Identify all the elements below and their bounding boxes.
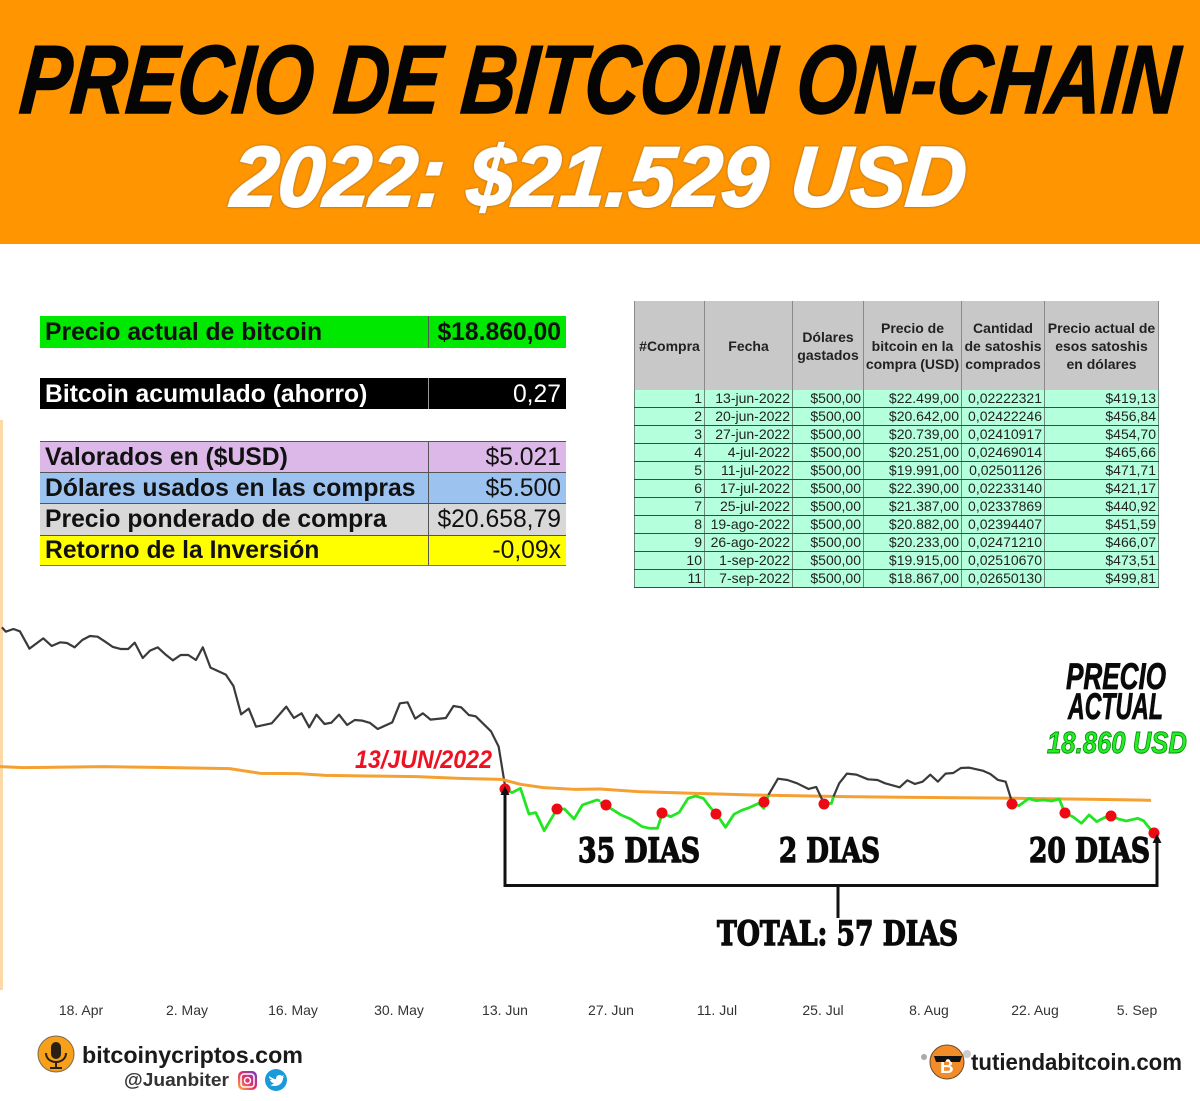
purchases table: 0,02510670 — [968, 552, 1042, 568]
row: bitcoin acumulado — [40, 378, 566, 409]
row: valorados: Valorados en ($USD) — [45, 444, 288, 471]
purchases table: $22.390,00 — [889, 480, 959, 496]
purchases table: $500,00 — [810, 570, 861, 586]
row: bitcoin acumulado: Bitcoin acumulado (ahorro) — [45, 381, 367, 408]
row: retorno: -0,09x — [492, 537, 561, 564]
purchases table: 0,02222321 — [968, 390, 1042, 406]
purchases table: #Compra — [639, 338, 700, 354]
purchases table: $20.739,00 — [889, 426, 959, 442]
footer right: tutiendabitcoin — [921, 1044, 1182, 1080]
purchases table: 4-jul-2022 — [728, 444, 790, 460]
line: bitcoin price right — [600, 768, 1154, 833]
purchases table: $500,00 — [810, 426, 861, 442]
purchases table: $454,70 — [1105, 426, 1156, 442]
purchases table: $20.882,00 — [889, 516, 959, 532]
x axis labels: 16. May — [268, 1002, 318, 1018]
purchases table: bitcoin en la — [872, 338, 953, 354]
purchases table: $471,71 — [1105, 462, 1156, 478]
purchases table: $500,00 — [810, 552, 861, 568]
label: total: TOTAL: 57 DIAS — [717, 914, 958, 954]
purchases table: esos satoshis — [1055, 338, 1148, 354]
row: dolares usados: Dólares usados en las compras — [45, 475, 415, 502]
purchases table: 1-sep-2022 — [719, 552, 790, 568]
row: valorados — [40, 441, 566, 472]
icon: twitter — [265, 1069, 287, 1091]
purchases table: $440,92 — [1105, 498, 1156, 514]
icon: instagram — [238, 1071, 257, 1090]
purchases table: $500,00 — [810, 462, 861, 478]
purchases table: 13-jun-2022 — [715, 390, 790, 406]
label: 2 dias: 2 DIAS — [779, 831, 880, 871]
price chart — [0, 420, 1187, 990]
purchases table: $21.387,00 — [889, 498, 959, 514]
row: precio actual: Precio actual de bitcoin — [45, 319, 322, 346]
purchases table: $20.251,00 — [889, 444, 959, 460]
purchases table: $19.915,00 — [889, 552, 959, 568]
purchases table: 0,02394407 — [968, 516, 1042, 532]
purchases table: en dólares — [1066, 356, 1137, 372]
row: dolares usados — [40, 472, 566, 503]
date label: 13/JUN/2022 — [355, 746, 492, 774]
purchases table: Fecha — [728, 338, 769, 354]
row: precio ponderado — [40, 503, 566, 535]
row: precio ponderado: Precio ponderado de compra — [45, 506, 387, 533]
purchases table: 1 — [694, 390, 702, 406]
x axis labels: 11. Jul — [697, 1002, 737, 1018]
purchases table: 0,02233140 — [968, 480, 1042, 496]
website text: bitcoinycriptos.com — [82, 1042, 303, 1068]
x axis labels: 27. Jun — [588, 1002, 634, 1018]
row: dolares usados: $5.500 — [485, 475, 561, 502]
purchases table: Dólares — [802, 328, 854, 344]
label: precio actual — [1066, 656, 1166, 727]
row: precio actual: $18.860,00 — [437, 319, 561, 346]
footer left: bitcoinycriptos — [38, 1036, 303, 1091]
purchases table: $451,59 — [1105, 516, 1156, 532]
purchases table: 5 — [694, 462, 702, 478]
purchases table: 10 — [686, 552, 702, 568]
icon: microphone logo — [38, 1036, 74, 1072]
purchases table: $500,00 — [810, 480, 861, 496]
purchases table: $500,00 — [810, 534, 861, 550]
purchases table: de satoshis — [964, 338, 1042, 354]
purchases table: 2 — [694, 408, 702, 424]
purchases table: 26-ago-2022 — [711, 534, 790, 550]
purchases table: compra (USD) — [866, 356, 959, 372]
summary table — [40, 316, 566, 566]
purchases table: 3 — [694, 426, 702, 442]
purchases table: $18.867,00 — [889, 570, 959, 586]
header banner — [0, 0, 1200, 244]
purchases table: $456,84 — [1105, 408, 1156, 424]
icon: bitcoin with sunglasses: B — [940, 1057, 954, 1078]
purchases table: $500,00 — [810, 516, 861, 532]
purchases table: $421,17 — [1105, 480, 1156, 496]
purchases table: 11-jul-2022 — [721, 462, 790, 478]
purchases table: $419,13 — [1105, 390, 1156, 406]
purchase markers — [500, 784, 1160, 838]
handle text: @Juanbiter — [124, 1070, 229, 1090]
row: valorados: $5.021 — [485, 444, 561, 471]
purchases table: $500,00 — [810, 408, 861, 424]
purchases table: 0,02410917 — [968, 426, 1042, 442]
line: bitcoin price left — [0, 627, 600, 831]
purchases table: 9 — [694, 534, 702, 550]
purchases table: 20-jun-2022 — [715, 408, 790, 424]
purchases table: $20.642,00 — [889, 408, 959, 424]
purchases table: 8 — [694, 516, 702, 532]
purchases table: 0,02422246 — [968, 408, 1042, 424]
label: 20 dias: 20 DIAS — [1029, 831, 1150, 871]
x axis labels: 22. Aug — [1011, 1002, 1059, 1018]
purchases table: $473,51 — [1105, 552, 1156, 568]
purchases table: Precio actual de — [1048, 320, 1155, 336]
purchases table: 27-jun-2022 — [715, 426, 790, 442]
purchases table: $500,00 — [810, 498, 861, 514]
purchases table: $22.499,00 — [889, 390, 959, 406]
label: 35 dias: 35 DIAS — [578, 831, 700, 871]
purchases table: 4 — [694, 444, 702, 460]
x axis labels: 25. Jul — [802, 1002, 844, 1018]
x axis labels: 2. May — [166, 1002, 208, 1018]
purchases table: 7-sep-2022 — [719, 570, 790, 586]
purchases table: Cantidad — [973, 320, 1033, 336]
purchases table: $499,81 — [1105, 570, 1156, 586]
x axis labels: 8. Aug — [909, 1002, 949, 1018]
purchases table: 0,02337869 — [968, 498, 1042, 514]
purchases table — [634, 301, 1159, 588]
purchases table: 19-ago-2022 — [711, 516, 790, 532]
subtitle: price: 2022: $21.529 USD — [226, 130, 971, 225]
purchases table: 0,02469014 — [968, 444, 1042, 460]
purchases table: $466,07 — [1105, 534, 1156, 550]
purchases table: $500,00 — [810, 390, 861, 406]
x axis labels — [59, 1002, 1157, 1018]
website text: tutiendabitcoin.com — [971, 1049, 1182, 1075]
x axis labels: 13. Jun — [482, 1002, 528, 1018]
purchases table: 11 — [687, 570, 702, 586]
row: precio actual — [40, 316, 566, 348]
purchases table: $500,00 — [810, 444, 861, 460]
purchases table: 0,02650130 — [968, 570, 1042, 586]
icon: bitcoin with sunglasses — [921, 1045, 971, 1079]
purchases table: $465,66 — [1105, 444, 1156, 460]
purchases table: 17-jul-2022 — [720, 480, 790, 496]
purchases table: 7 — [694, 498, 702, 514]
purchases table: 0,02501126 — [969, 462, 1042, 478]
purchases table: Precio de — [881, 320, 944, 336]
row: retorno — [40, 535, 566, 566]
row: retorno: Retorno de la Inversión — [45, 537, 319, 564]
row: bitcoin acumulado: 0,27 — [513, 381, 561, 408]
purchases table: $19.991,00 — [889, 462, 959, 478]
bracket with arrows — [500, 786, 1162, 918]
purchases table: 0,02471210 — [968, 534, 1042, 550]
purchases table: 25-jul-2022 — [720, 498, 790, 514]
purchases table: 6 — [694, 480, 702, 496]
x axis labels: 30. May — [374, 1002, 424, 1018]
x axis labels: 18. Apr — [59, 1002, 103, 1018]
row: precio ponderado: $20.658,79 — [437, 506, 561, 533]
purchases table: gastados — [797, 346, 859, 362]
purchases table: $20.233,00 — [889, 534, 959, 550]
purchases table: comprados — [965, 356, 1041, 372]
x axis labels: 5. Sep — [1117, 1002, 1157, 1018]
